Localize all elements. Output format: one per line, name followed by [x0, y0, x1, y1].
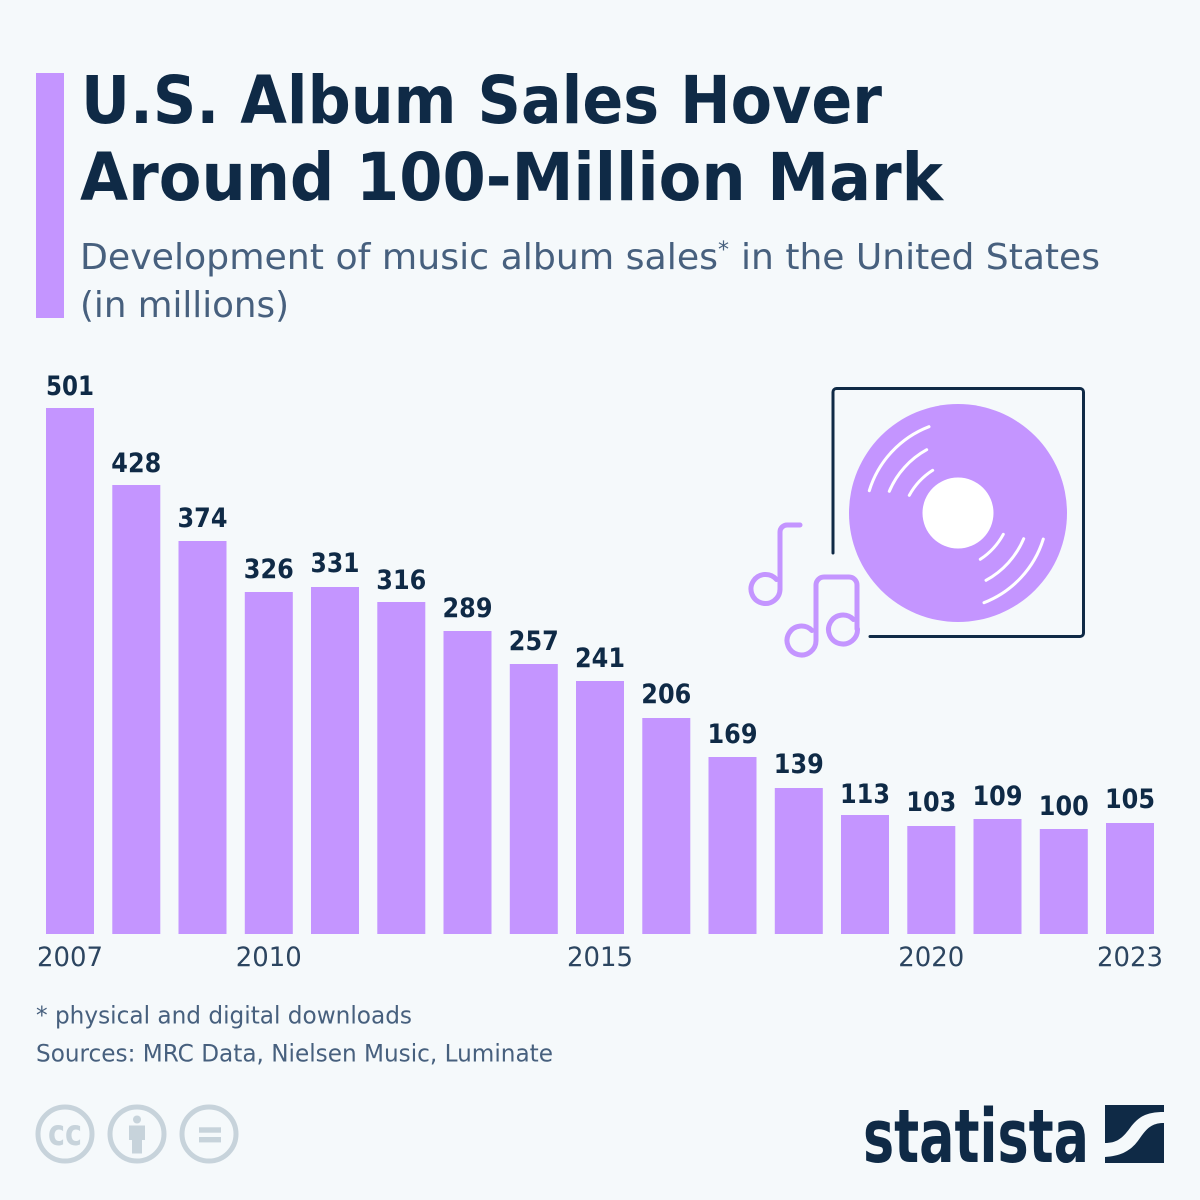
- value labels: 326: [244, 554, 294, 585]
- title: Around 100-Million Mark: [80, 139, 945, 216]
- value labels: 169: [708, 719, 758, 750]
- value labels: 374: [178, 503, 228, 534]
- value labels: 113: [840, 779, 890, 810]
- value labels: 428: [111, 448, 161, 479]
- year labels: 2020: [898, 942, 964, 973]
- value labels: 109: [972, 781, 1022, 812]
- subtitle: in the United States: [741, 237, 1100, 278]
- value labels: [46, 371, 1155, 822]
- footnote: * physical and digital downloads: [36, 1002, 412, 1030]
- bars: [46, 408, 1154, 934]
- value labels: 331: [310, 548, 360, 579]
- value labels: 139: [774, 749, 824, 780]
- icon: statista mark: [1105, 1105, 1164, 1163]
- sources: Sources: MRC Data, Nielsen Music, Luminate: [36, 1040, 553, 1068]
- title: [80, 62, 945, 216]
- value labels: 241: [575, 643, 625, 674]
- subtitle: [80, 237, 1100, 326]
- value labels: 105: [1105, 784, 1155, 815]
- icon: double music note: [787, 577, 858, 655]
- value labels: 257: [509, 626, 559, 657]
- bar chart: [37, 371, 1163, 973]
- icon: creative commons: [38, 1107, 92, 1161]
- icon: attribution: [110, 1107, 164, 1161]
- year labels: 2010: [236, 942, 302, 973]
- value labels: 501: [46, 371, 94, 402]
- value labels: 316: [376, 565, 426, 596]
- icon: vinyl disc: [849, 404, 1067, 622]
- icon: no derivatives: [182, 1107, 236, 1161]
- year labels: [37, 942, 1163, 973]
- value labels: 103: [906, 787, 956, 818]
- year labels: 2015: [567, 942, 633, 973]
- icon: vinyl record with music notes: [751, 388, 1084, 655]
- icon: record sleeve: [833, 388, 1084, 636]
- title accent bar: [36, 73, 64, 318]
- year labels: 2023: [1097, 942, 1163, 973]
- subtitle: *: [718, 238, 729, 263]
- value labels: 206: [641, 679, 691, 710]
- value labels: 100: [1039, 791, 1089, 822]
- subtitle: Development of music album sales: [80, 237, 718, 278]
- year labels: 2007: [37, 942, 103, 973]
- icon: creative commons: cc: [48, 1113, 82, 1154]
- title: U.S. Album Sales Hover: [81, 62, 882, 139]
- statista logo: statista: [863, 1094, 1089, 1180]
- subtitle: (in millions): [80, 285, 289, 326]
- value labels: 289: [442, 593, 492, 624]
- icon: single music note: [751, 525, 800, 603]
